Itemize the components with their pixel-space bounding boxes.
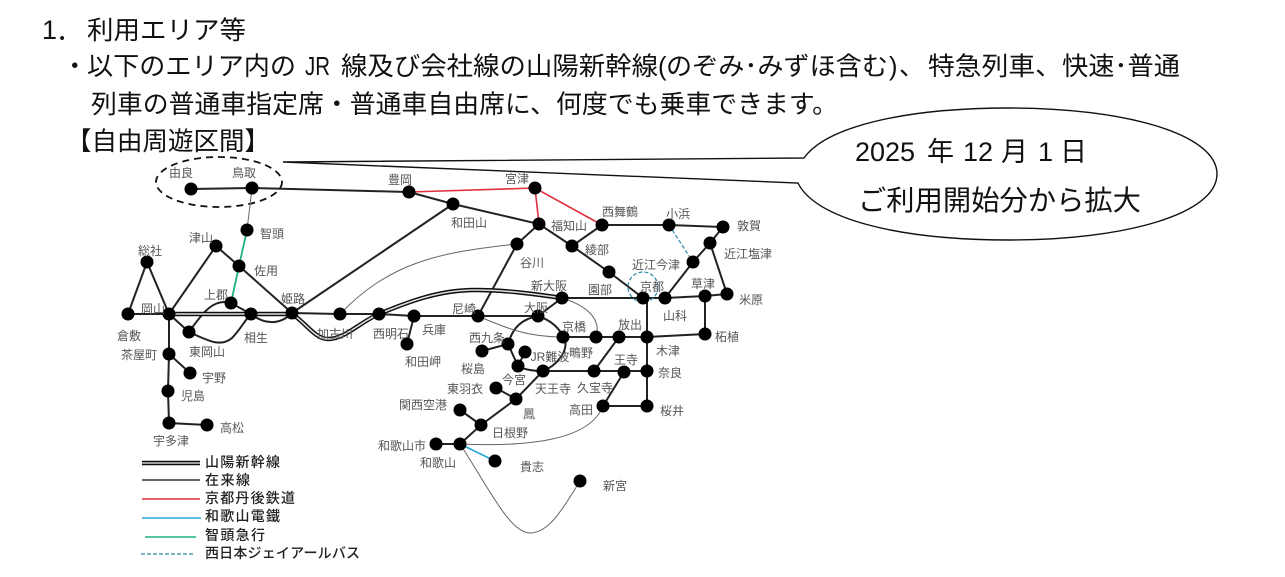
West JR bus routes (628, 225, 693, 302)
station: 近江塩津 (704, 236, 772, 261)
subheading: 自由周遊区間: 【自由周遊区間】 (66, 128, 270, 156)
station: 岡山 (141, 302, 176, 320)
station: 今宮 (502, 360, 526, 387)
station: JR難波: JR難波 (531, 349, 569, 364)
legend: 在来線 (142, 472, 250, 488)
station: 西舞鶴: 西舞鶴 (602, 205, 638, 219)
station: 天王寺: 天王寺 (535, 382, 571, 396)
station: 児島: 児島 (181, 388, 205, 403)
station: 今宮: 今宮 (502, 372, 526, 387)
station: 敦賀: 敦賀 (737, 218, 761, 233)
station: 東羽衣: 東羽衣 (447, 382, 483, 396)
text block: description (62, 53, 1180, 119)
station: 倉敷: 倉敷 (117, 329, 141, 343)
station: 尼崎 (452, 302, 484, 322)
station: 加古川: 加古川 (317, 326, 353, 341)
station: 王寺 (614, 353, 638, 378)
station: JR難波 (518, 346, 569, 364)
station: 小浜 (662, 207, 690, 232)
station: 上郡: 上郡 (204, 288, 228, 302)
stations (117, 165, 772, 493)
station: 総社: 総社 (138, 243, 162, 258)
station: 王寺: 王寺 (614, 353, 638, 367)
Wakayama Electric Railway line (460, 444, 495, 461)
station: 鴫野 (569, 330, 602, 360)
station: 久宝寺: 久宝寺 (577, 381, 613, 395)
station: 兵庫 (408, 310, 446, 337)
station: 和田岬 (400, 338, 441, 369)
callout: expansion from 2025-12-01: 1 (1038, 137, 1053, 167)
station: 柘植 (698, 328, 739, 344)
station: 関西空港 (399, 398, 466, 416)
station: 西舞鶴 (596, 205, 638, 232)
legend: 京都丹後鉄道: 京都丹後鉄道 (205, 490, 295, 506)
callout: expansion from 2025-12-01: 日 (1060, 137, 1087, 167)
station: 大阪 (524, 301, 548, 322)
Kyoto Tango Railway lines (409, 188, 602, 225)
station: 奈良 (640, 364, 682, 380)
station: 宮津: 宮津 (505, 171, 529, 186)
text block: description: 線及び会社線の山陽新幹線 (341, 53, 658, 81)
station: 加古川 (317, 308, 353, 341)
station: 由良 (169, 165, 198, 196)
station: 和歌山市 (378, 438, 442, 453)
station: 智頭: 智頭 (260, 226, 284, 241)
station: 津山 (189, 231, 222, 252)
station: 西明石 (372, 308, 409, 341)
station: 園部: 園部 (588, 283, 612, 297)
text block: description: JR (305, 53, 330, 81)
dashed outline: 由良 and 鳥取 expansion area (156, 157, 282, 207)
station: 小浜: 小浜 (666, 207, 690, 221)
text block: description: 、 (899, 53, 925, 81)
station: 大阪: 大阪 (524, 301, 548, 315)
callout: expansion from 2025-12-01: 年 (927, 137, 954, 167)
station: 和歌山市: 和歌山市 (378, 439, 426, 453)
station: 日根野: 日根野 (492, 426, 528, 440)
station: 宇野: 宇野 (202, 371, 226, 385)
legend: 山陽新幹線 (142, 454, 280, 470)
station: 鴫野: 鴫野 (569, 346, 593, 360)
station: 新大阪: 新大阪 (531, 279, 567, 293)
station: 近江塩津: 近江塩津 (724, 246, 772, 261)
heading: 利用エリア等: 利用エリア等 (87, 17, 246, 45)
legend: 智頭急行: 智頭急行 (205, 527, 265, 543)
legend: 和歌山電鐵: 和歌山電鐵 (205, 508, 280, 524)
station: 京都 (636, 280, 664, 304)
station: 山科 (658, 292, 687, 323)
station: 新宮: 新宮 (603, 478, 627, 493)
station: 新宮 (574, 474, 627, 493)
callout: expansion from 2025-12-01: 月 (1001, 137, 1028, 167)
station: 京都: 京都 (640, 280, 664, 294)
rail map (117, 165, 772, 533)
station: 山科: 山科 (663, 309, 687, 323)
station: 茶屋町 (121, 348, 176, 362)
station: 佐用: 佐用 (254, 264, 278, 278)
station: 高田: 高田 (569, 403, 593, 417)
station: 茶屋町: 茶屋町 (121, 348, 157, 362)
Chizu Express line (231, 230, 247, 303)
station: 奈良: 奈良 (658, 365, 682, 380)
station: 豊岡 (388, 173, 416, 198)
station: 桜井 (640, 400, 684, 418)
legend: 西日本ジェイアールバス: 西日本ジェイアールバス (205, 545, 360, 561)
station: 桜井: 桜井 (660, 404, 684, 418)
station: 智頭 (240, 224, 284, 241)
station: 貴志 (488, 454, 544, 474)
station: 放出: 放出 (618, 317, 642, 332)
station: 米原: 米原 (739, 293, 763, 307)
station: 兵庫: 兵庫 (422, 323, 446, 337)
station: 草津 (691, 277, 715, 302)
station: 総社 (138, 243, 162, 268)
station: 近江今津 (632, 256, 700, 272)
legend: 在来線: 在来線 (205, 472, 250, 488)
minor curved lines (247, 188, 603, 533)
text block: description: 列車の普通車指定席・普通車自由席に、何度でも乗車できます。 (91, 91, 838, 119)
heading: 利用エリア等 (42, 15, 246, 46)
station: 京橋: 京橋 (562, 320, 586, 334)
text block: description: 快速･普通 (1062, 53, 1180, 81)
station: 西九条: 西九条 (469, 331, 505, 345)
callout: expansion from 2025-12-01: 12 (963, 137, 993, 167)
station: 新大阪 (531, 279, 568, 304)
callout: expansion from 2025-12-01: ご利用開始分から拡大 (858, 185, 1141, 216)
station: 関西空港: 関西空港 (399, 398, 447, 412)
station: 桜島: 桜島 (461, 361, 485, 376)
station: 鳥取 (232, 165, 258, 194)
station: 津山: 津山 (189, 231, 213, 245)
station: 和田山 (446, 198, 487, 230)
station: 姫路: 姫路 (281, 291, 305, 306)
station: 久宝寺 (577, 364, 613, 395)
station: 草津: 草津 (691, 277, 715, 291)
station: 上郡 (204, 288, 238, 310)
station: 尼崎: 尼崎 (452, 302, 476, 316)
station: 放出 (612, 317, 642, 344)
station: 鳳 (510, 392, 535, 421)
text block: description: のぞみ･みずほ含む (666, 53, 888, 81)
station: 木津: 木津 (656, 344, 680, 358)
station: 相生 (244, 308, 268, 345)
station: 宇多津 (153, 416, 189, 448)
station: 柘植: 柘植 (715, 329, 739, 344)
station: 園部 (588, 266, 616, 297)
station: 豊岡: 豊岡 (388, 173, 412, 187)
station: 綾部 (566, 240, 609, 257)
station: 天王寺 (535, 364, 571, 396)
text block: description: 特急列車、 (928, 53, 1062, 81)
station: 和歌山: 和歌山 (420, 456, 456, 470)
station: 倉敷 (117, 308, 141, 343)
station: 由良: 由良 (169, 165, 193, 180)
station: 佐用 (232, 260, 278, 278)
station: 東羽衣 (447, 382, 502, 396)
station: 高田 (569, 400, 610, 417)
station: 宇多津: 宇多津 (153, 434, 189, 448)
station: 木津 (640, 330, 680, 358)
callout: expansion from 2025-12-01 (283, 108, 1217, 240)
legend: 山陽新幹線: 山陽新幹線 (205, 454, 280, 470)
station: 谷川 (510, 238, 544, 270)
text block: description: ・ (62, 53, 88, 81)
station: 西九条 (469, 331, 514, 350)
station: 相生: 相生 (244, 331, 268, 345)
text block: description: ) (889, 53, 898, 81)
station: 和歌山 (420, 438, 466, 470)
station: 児島 (162, 384, 205, 403)
station: 東岡山 (182, 326, 225, 359)
station: 福知山: 福知山 (551, 218, 587, 233)
station: 鳳: 鳳 (523, 407, 535, 421)
station: 高松 (200, 418, 244, 435)
station: 貴志: 貴志 (520, 460, 544, 474)
station: 高松: 高松 (220, 421, 244, 435)
station: 宇野 (184, 366, 226, 385)
station: 日根野 (474, 418, 528, 440)
station: 鳥取: 鳥取 (232, 165, 256, 180)
Sanyo Shinkansen double line (169, 290, 562, 339)
station: 福知山 (532, 218, 587, 233)
station: 西明石: 西明石 (373, 327, 409, 341)
station: 米原 (720, 288, 763, 307)
station: 京橋 (556, 320, 586, 344)
station: 近江今津: 近江今津 (632, 257, 680, 272)
station: 和田岬: 和田岬 (405, 355, 441, 369)
heading: 利用エリア等: 1 (42, 15, 57, 45)
station: 桜島 (461, 344, 488, 376)
station: 岡山: 岡山 (141, 302, 165, 316)
station: 姫路 (281, 291, 305, 320)
station: 和田山: 和田山 (451, 216, 487, 230)
legend: 和歌山電鐵 (142, 508, 280, 524)
callout: expansion from 2025-12-01: 2025 (855, 137, 915, 167)
station: 綾部: 綾部 (585, 243, 609, 257)
text block: description: 以下のエリア内の (87, 53, 296, 81)
text block: description: ( (658, 53, 667, 81)
legend (141, 454, 360, 561)
legend: 智頭急行 (145, 527, 265, 543)
station: 東岡山: 東岡山 (189, 345, 225, 359)
station: 宮津 (505, 171, 542, 194)
station: 敦賀 (716, 218, 761, 234)
heading: 利用エリア等: ． (56, 18, 82, 46)
station: 谷川: 谷川 (520, 256, 544, 270)
conventional lines (128, 188, 727, 444)
